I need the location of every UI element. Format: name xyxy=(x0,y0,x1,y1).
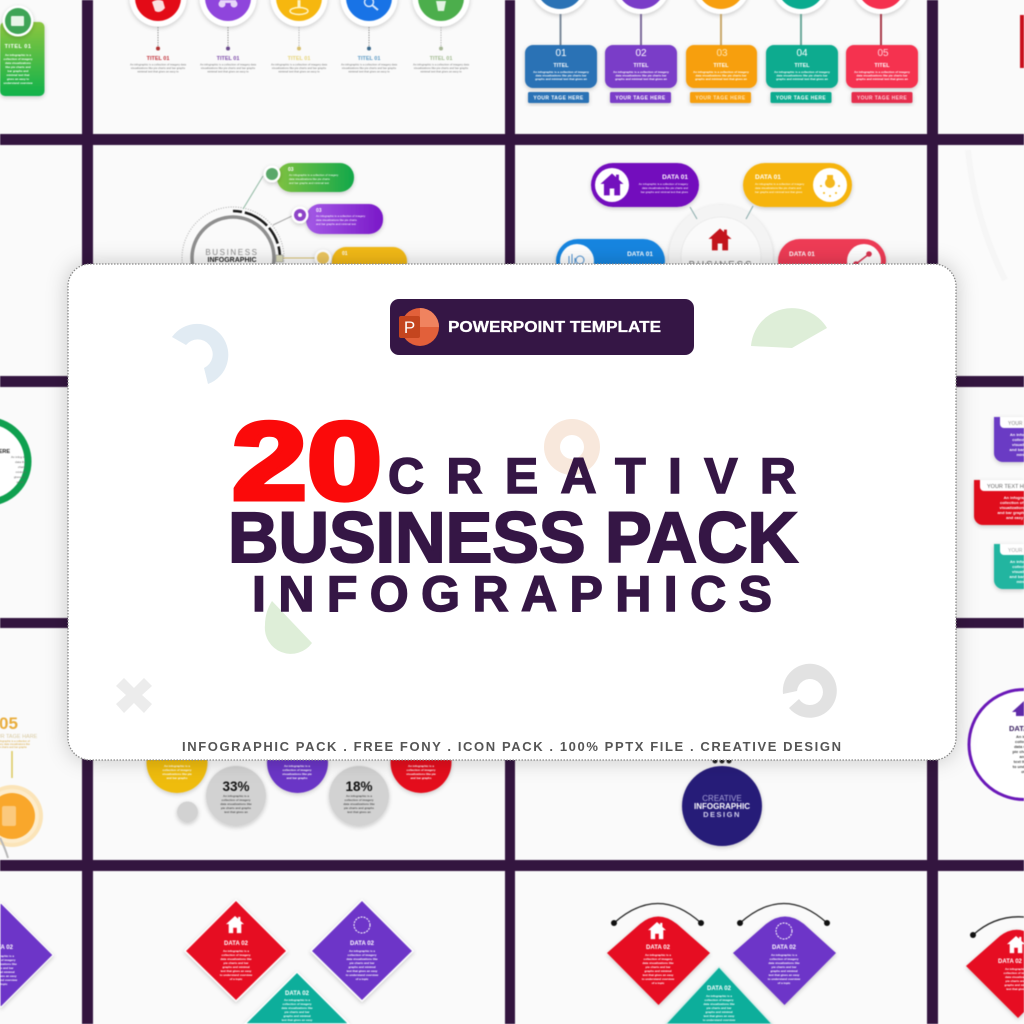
red arched diamond: text that gives an easy xyxy=(643,973,674,977)
green ring: charts xyxy=(18,465,26,469)
red arched diamond: collection of imagery xyxy=(644,957,673,961)
card 01: An infographic is a collection of imagery xyxy=(533,70,589,74)
item 3 yellow xyxy=(270,0,328,74)
grey circle 18%: 18% xyxy=(345,779,373,794)
purple pill: DATA 01 xyxy=(662,174,688,181)
red arched diamond: of a topic xyxy=(652,981,665,985)
card 05: 05 xyxy=(877,48,889,59)
red diamond: DATA 02 xyxy=(224,941,249,947)
green card: data visualizations xyxy=(5,61,31,65)
teal diamond: graphs and minimal xyxy=(283,1014,311,1018)
yellow pill xyxy=(276,247,407,277)
purple diamond: text that gives an easy xyxy=(347,969,378,973)
red diamond: of a topic xyxy=(230,977,243,981)
yellow circle: visualizations like pie xyxy=(162,772,192,776)
red arched diamond: graphs and minimal xyxy=(644,969,672,973)
card 03: 03 xyxy=(716,48,728,59)
panel: faint swoosh slide xyxy=(938,145,1024,376)
green card: bar graphs and xyxy=(8,69,29,73)
purple diamond: collection of imagery xyxy=(348,953,377,957)
teal diamond: pie charts and bar xyxy=(285,1010,310,1014)
teal diamond: text that gives an easy xyxy=(282,1018,313,1022)
grey circle 18%: An infographic is a xyxy=(346,794,372,798)
teal diamond: pie charts and bar xyxy=(707,1006,732,1010)
green pill xyxy=(243,163,354,209)
purple arched diamond: of a topic xyxy=(778,981,791,985)
item 3 yellow: minimal text that gives an easy to xyxy=(278,70,320,74)
yellow circle: collection of imagery xyxy=(163,768,192,772)
card 01: graphs and minimal text that gives an xyxy=(535,77,587,81)
purple ring xyxy=(969,690,1024,800)
purple circle: collection of imagery xyxy=(283,768,312,772)
navy badge: DESIGN xyxy=(703,810,741,819)
green ring: gives an xyxy=(14,475,25,479)
card 04: YOUR TAGE HERE xyxy=(776,96,826,102)
yellow pill: 01 xyxy=(342,251,348,257)
green card: minimal text that xyxy=(7,73,30,77)
grey circle 33%: An infographic is a xyxy=(223,794,249,798)
teal diamond xyxy=(666,967,772,1024)
card 01 xyxy=(525,0,597,103)
card 02 xyxy=(605,0,677,103)
card 02: YOUR TAGE HERE xyxy=(615,96,666,102)
green card: TITEL 01 xyxy=(5,44,31,50)
grey circle 18%: data visualizations like xyxy=(343,802,375,806)
card 05: YOUR TAGE HERE xyxy=(857,96,907,102)
yellow circle xyxy=(146,732,208,793)
small grey dot xyxy=(177,802,198,822)
red diamond: An infographic is a xyxy=(223,949,249,953)
card 03: TITEL xyxy=(713,63,729,69)
purple arched diamond: data visualizations like xyxy=(768,961,800,965)
red arched diamond xyxy=(607,904,710,1005)
red arched diamond: DATA 02 xyxy=(998,959,1023,965)
card 04: graphs and minimal text that gives an xyxy=(776,77,828,81)
purple arched diamond: to understand overview xyxy=(768,977,801,981)
powerpoint icon xyxy=(399,308,439,346)
grey circle 18%: text that gives an xyxy=(347,810,371,814)
ring graphic xyxy=(182,207,284,309)
yellow circle: An infographic is a xyxy=(164,764,190,768)
card 05: graphs and minimal text that gives an xyxy=(856,77,908,81)
card 02: TITEL xyxy=(633,63,649,69)
card 04: 04 xyxy=(796,48,808,59)
purple circle: An infographic is a xyxy=(284,764,310,768)
red circle: An infographic is a xyxy=(408,764,434,768)
purple pill xyxy=(591,163,699,207)
title line: creativr: CREATIVR xyxy=(388,448,796,504)
grey circle 33%: collection of imagery xyxy=(222,798,251,802)
teal tabbed card xyxy=(994,544,1024,589)
teal diamond: graphs and minimal xyxy=(705,1010,733,1014)
grey circle 33%: pie charts and graphs xyxy=(221,806,251,810)
red diamond: collection of imagery xyxy=(222,953,251,957)
item 3 yellow: TITEL 01 xyxy=(288,56,310,62)
red arched diamond: DATA 02 xyxy=(646,945,671,951)
powerpoint icon: P xyxy=(404,318,415,337)
card 04 xyxy=(766,0,838,103)
panel: creative infographic design badge xyxy=(515,628,927,860)
powerpoint badge xyxy=(390,299,694,355)
teal diamond xyxy=(245,972,349,1024)
item 4 blue: minimal text that gives an easy to xyxy=(348,70,390,74)
item 4 blue xyxy=(340,0,398,74)
panel: bottom-right arched diamond xyxy=(938,871,1024,1024)
purple pill: bar graphs and minimal text that gives xyxy=(641,190,689,194)
purple diamond: to understand overview xyxy=(346,973,379,977)
item 5 green: An infographic is a collection of imagery data xyxy=(413,62,470,66)
card 03: data visualizations like pie charts bar xyxy=(695,74,747,78)
red arched diamond: to understand overview xyxy=(642,977,675,981)
red diamond: pie charts and bar xyxy=(224,961,249,965)
item 1 red: minimal text that gives an easy to xyxy=(137,70,179,74)
purple diamond: of a topic xyxy=(356,977,369,981)
red circle: visualizations like pie xyxy=(406,772,436,776)
center circle: BUSINESS xyxy=(689,260,753,271)
purple tabbed card xyxy=(994,417,1024,462)
panel: five numbered cards xyxy=(515,0,927,134)
purple pill: An infographic is a collection of imagery xyxy=(316,214,366,218)
purple diamond: pie charts and bar xyxy=(350,961,375,965)
panel: bottom-left diamond xyxy=(0,871,82,1024)
yellow pill: data visualizations like pie charts and xyxy=(755,186,802,190)
purple circle: visualizations like pie xyxy=(282,772,312,776)
green card: like pie charts and xyxy=(5,65,31,69)
purple arched diamond: DATA 02 xyxy=(772,945,797,951)
navy badge xyxy=(682,758,762,846)
blue pill: DATA 01 xyxy=(627,251,653,258)
green pill: data visualizations like pie charts xyxy=(289,177,330,181)
grey circle 33%: text that gives an xyxy=(224,810,248,814)
purple tabbed card: YOUR xyxy=(1008,421,1023,427)
ring graphic: BUSINESS xyxy=(205,248,259,257)
panel: data pills around center xyxy=(515,145,927,376)
card 03: YOUR TAGE HERE xyxy=(695,96,746,102)
green ring xyxy=(0,420,28,502)
decor: blue arc xyxy=(172,324,228,384)
green pill: An infographic is a collection of imagery xyxy=(289,173,339,177)
item 1 red: visualizations like pie charts and bar graphs xyxy=(131,66,186,70)
item 5 green: TITEL 01 xyxy=(430,56,452,62)
blue pill xyxy=(556,239,665,283)
teal diamond: to understand overview xyxy=(703,1018,736,1022)
card 01: data visualizations like pie charts bar xyxy=(535,74,587,78)
teal diamond: DATA 02 xyxy=(707,986,732,992)
panel: step 05 slide xyxy=(0,628,82,860)
card 04: data visualizations like pie charts bar xyxy=(776,74,828,78)
purple diamond xyxy=(311,900,413,1001)
purple arched diamond: pie charts and bar xyxy=(772,965,797,969)
footer tagline: INFOGRAPHIC PACK . FREE FONY . ICON PACK . 100% PPTX FILE . CREATIVE DESIGN xyxy=(182,739,841,754)
red circle: collection of imagery xyxy=(407,768,436,772)
item 5 green: visualizations like pie charts and bar graphs xyxy=(414,66,469,70)
red arched diamond: An infographic is a xyxy=(645,953,671,957)
grey circle 18% xyxy=(329,766,389,826)
decor: green wedge xyxy=(265,601,312,654)
card 05 xyxy=(846,0,918,103)
teal diamond: collection of imagery xyxy=(283,1002,312,1006)
red diamond: graphs and minimal xyxy=(222,965,250,969)
card 02: graphs and minimal text that gives an xyxy=(615,77,667,81)
green card: collection of imagery xyxy=(4,57,33,61)
grey circle 33%: 33% xyxy=(222,779,250,794)
panel: top-right slide xyxy=(938,0,1024,134)
purple pill: An infographic is a collection of imagery xyxy=(639,182,689,186)
teal diamond: data visualizations like xyxy=(281,1006,313,1010)
red diamond: text that gives an easy xyxy=(221,969,252,973)
green ring: minimal xyxy=(16,470,26,474)
purple pill: data visualizations like pie charts and xyxy=(642,186,688,190)
red circle xyxy=(390,732,452,793)
purple diamond: data visualizations like xyxy=(346,957,378,961)
panel: blank slide left xyxy=(0,145,82,376)
center circle xyxy=(669,205,773,309)
card 03 xyxy=(686,0,757,103)
green ring: data the xyxy=(15,460,26,464)
title number 20: 20 xyxy=(232,400,382,523)
panel: top-left slide xyxy=(0,0,82,134)
item 3 yellow: visualizations like pie charts and bar graphs xyxy=(272,66,327,70)
item 2 purple: visualizations like pie charts and bar graphs xyxy=(201,66,256,70)
panel: diamonds slide xyxy=(93,871,505,1024)
card 02: 02 xyxy=(635,48,647,59)
purple circle: and bar graphs xyxy=(287,776,308,780)
green card: understand overview xyxy=(4,81,33,85)
purple arched diamond xyxy=(733,904,836,1005)
purple circle xyxy=(267,732,328,793)
card 02: An infographic is a collection of imagery xyxy=(613,70,669,74)
red arched diamond: pie charts and bar xyxy=(646,965,671,969)
red circle: and bar graphs xyxy=(411,776,432,780)
teal diamond: An infographic is a xyxy=(706,994,732,998)
red diamond: to understand overview xyxy=(220,973,253,977)
item 5 green xyxy=(412,0,470,74)
yellow pill xyxy=(743,163,852,207)
card 04: TITEL xyxy=(794,63,810,69)
red pill xyxy=(778,239,886,283)
ring graphic: INFOGRAPHIC xyxy=(208,257,256,264)
purple arched diamond: collection of imagery xyxy=(770,957,799,961)
item 4 blue: An infographic is a collection of imagery data xyxy=(341,62,398,66)
red diamond: data visualizations like xyxy=(220,957,252,961)
card 03: An infographic is a collection of imagery xyxy=(693,70,749,74)
main title card xyxy=(68,264,956,760)
item 2 purple xyxy=(200,0,257,74)
purple arched diamond: text that gives an easy xyxy=(769,973,800,977)
decor: grey ring xyxy=(783,664,837,718)
card 05: TITEL xyxy=(874,63,890,69)
green card: An infographic is a xyxy=(5,53,31,57)
yellow pill: An infographic is a collection of imagery xyxy=(755,182,805,186)
panel: tabbed cards slide right xyxy=(938,387,1024,618)
card 05: An infographic is a collection of imagery xyxy=(854,70,910,74)
navy badge: CREATIVE xyxy=(702,794,742,803)
yellow pill: DATA 01 xyxy=(755,174,781,181)
panel: percentage circles xyxy=(93,628,505,860)
red diamond xyxy=(185,900,287,1001)
green ring: under xyxy=(16,480,24,484)
navy badge: INFOGRAPHIC xyxy=(694,802,750,811)
decor: orange ring xyxy=(544,419,600,475)
powerpoint badge: POWERPOINT TEMPLATE xyxy=(448,319,661,336)
card 01: YOUR TAGE HERE xyxy=(533,96,584,102)
purple pill xyxy=(273,204,383,234)
teal tabbed card: YOUR xyxy=(1008,548,1023,554)
panel: purple ring slide right xyxy=(938,628,1024,860)
grey circle 33% xyxy=(206,766,266,826)
item 2 purple: TITEL 01 xyxy=(217,56,239,62)
green card xyxy=(0,6,44,96)
decor: grey cross xyxy=(116,678,152,713)
item 2 purple: An infographic is a collection of imagery data xyxy=(200,62,257,66)
card 01: TITEL xyxy=(553,63,569,69)
item 1 red xyxy=(130,0,187,74)
purple pill: data visualizations like pie charts xyxy=(316,218,357,222)
orange circle xyxy=(0,785,43,858)
grey circle 18%: pie charts and graphs xyxy=(344,806,374,810)
purple diamond xyxy=(0,903,53,1007)
green pill: 03 xyxy=(288,167,294,173)
teal diamond: An infographic is a xyxy=(284,998,310,1002)
green ring: An infog is xyxy=(11,455,25,459)
purple arched diamond: graphs and minimal xyxy=(770,969,798,973)
purple diamond: DATA 02 xyxy=(350,941,375,947)
red tabbed card xyxy=(974,480,1024,525)
grey circle 33%: data visualizations like xyxy=(220,802,252,806)
panel: five circles with titles xyxy=(93,0,505,134)
teal diamond: collection of imagery xyxy=(705,998,734,1002)
panel: text cards slide xyxy=(93,387,927,618)
title line: infographics: INFOGRAPHICS xyxy=(252,566,772,622)
purple pill: and bar graphs and minimal text xyxy=(316,222,356,226)
card 03: graphs and minimal text that gives an xyxy=(695,77,747,81)
panel: business infographic ring xyxy=(93,145,505,376)
panel: arched diamonds slide xyxy=(515,871,927,1024)
green card: gives an easy to xyxy=(7,77,29,81)
item 4 blue: TITEL 01 xyxy=(358,56,380,62)
grey circle 18%: collection of imagery xyxy=(345,798,374,802)
decor: green fan xyxy=(751,308,827,348)
card 05: data visualizations like pie charts bar xyxy=(856,74,908,78)
teal diamond: DATA 02 xyxy=(285,991,310,997)
item 2 purple: minimal text that gives an easy to xyxy=(207,70,249,74)
yellow circle: and bar graphs xyxy=(167,776,188,780)
red arched diamond: data visualizations like xyxy=(642,961,674,965)
item 4 blue: visualizations like pie charts and bar graphs xyxy=(342,66,397,70)
panel: green ring slide left xyxy=(0,387,82,618)
purple diamond: An infographic is a xyxy=(349,949,375,953)
yellow pill: bar graphs and minimal text that gives xyxy=(755,190,803,194)
item 5 green: minimal text that gives an easy to xyxy=(420,70,462,74)
purple pill: 03 xyxy=(316,208,322,214)
card 01: 01 xyxy=(555,48,567,59)
item 1 red: An infographic is a collection of imagery data xyxy=(130,62,187,66)
item 3 yellow: An infographic is a collection of imagery data xyxy=(271,62,328,66)
card 02: data visualizations like pie charts bar xyxy=(615,74,667,78)
purple arched diamond: An infographic is a xyxy=(771,953,797,957)
green pill: and bar graphs and minimal text xyxy=(289,181,329,185)
title line: business pack: BUSINESS PACK xyxy=(228,499,798,578)
red pill: DATA 01 xyxy=(789,251,815,258)
red arched diamond xyxy=(966,917,1024,1018)
teal diamond: text that gives an easy xyxy=(704,1014,735,1018)
item 1 red: TITEL 01 xyxy=(147,56,169,62)
teal diamond: data visualizations like xyxy=(703,1002,735,1006)
purple diamond: graphs and minimal xyxy=(348,965,376,969)
card 04: An infographic is a collection of imagery xyxy=(774,70,830,74)
